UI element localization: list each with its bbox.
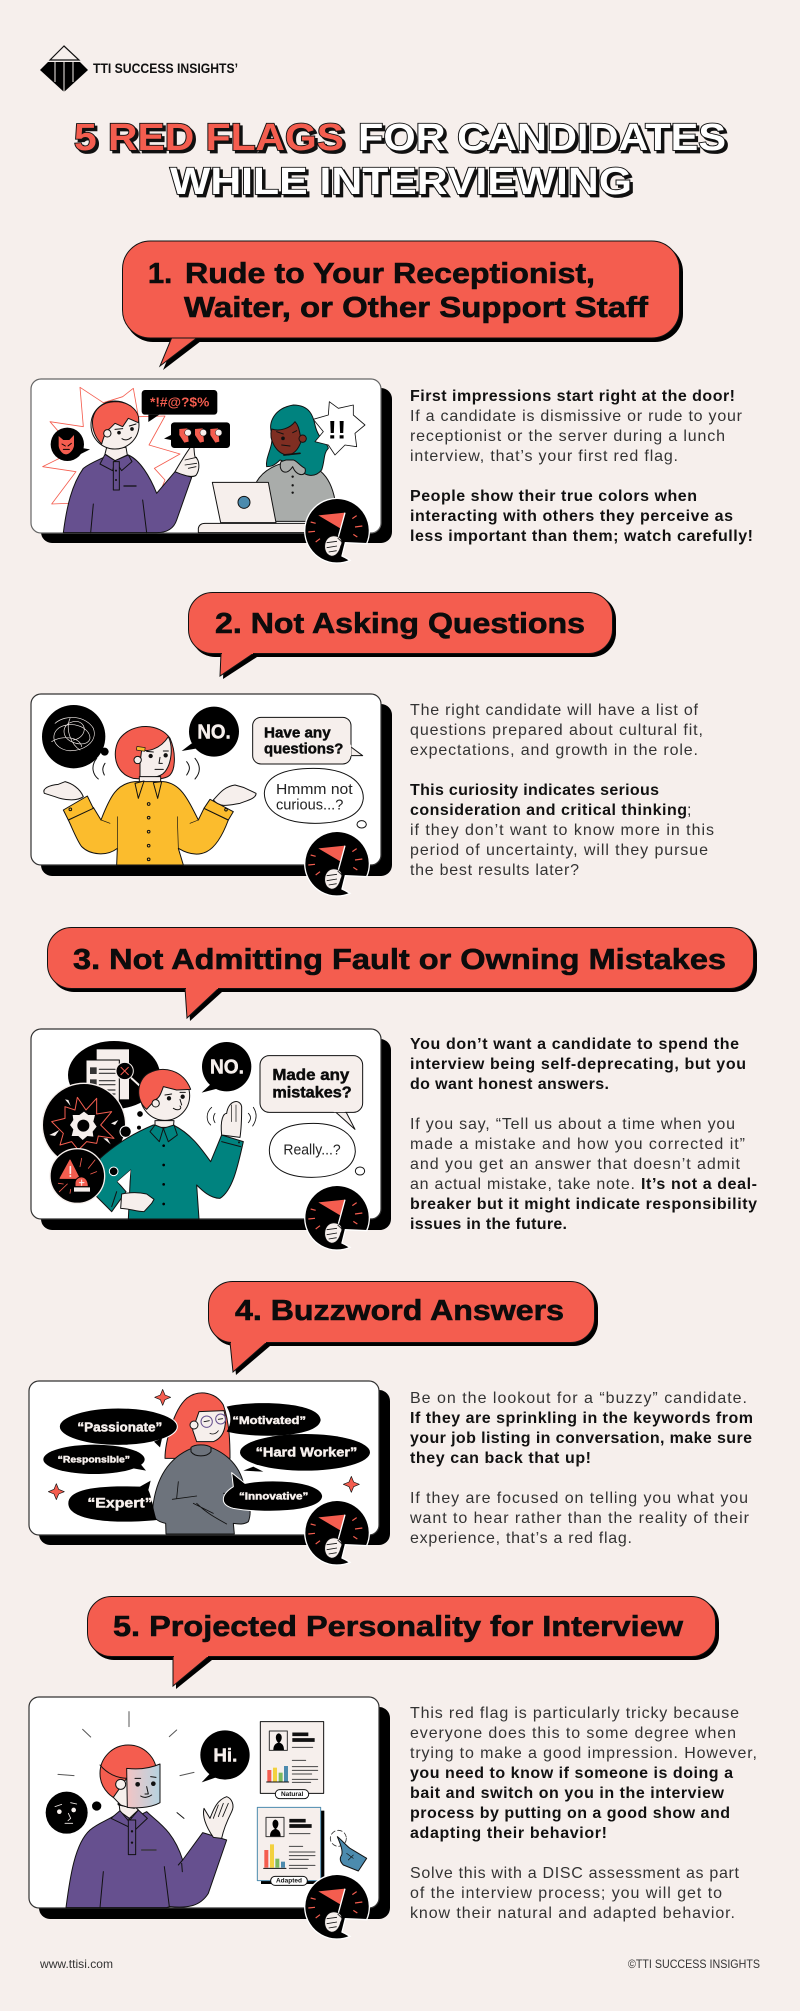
section 2 text: This curiosity indicates serious — [410, 782, 659, 799]
figures: man with mask and resumes: Natural — [281, 1791, 304, 1798]
section 2 text — [410, 702, 714, 879]
section 3 text: and you get an answer that doesn’t admit — [410, 1156, 741, 1173]
section 5 text: trying to make a good impression. However, — [410, 1745, 757, 1762]
panel 2: no questions illustration — [31, 694, 392, 876]
icon: red flag badge 3 — [305, 1185, 369, 1250]
section 1 heading bubble: Waiter, or Other Support Staff — [184, 292, 648, 324]
section 3 text: If you say, “Tell us about a time when you — [410, 1116, 735, 1133]
figures: shrugging woman: Hmmm not — [276, 782, 353, 798]
section 5 text: everyone does this to some degree when — [410, 1725, 736, 1742]
section 3 text: do want honest answers. — [410, 1076, 609, 1093]
section 2 text: expectations, and growth in the role. — [410, 742, 698, 759]
section 2 text: questions prepared about cultural fit, — [410, 722, 703, 739]
section 5 text: of the interview process; you will get to — [410, 1885, 722, 1902]
section 4 text: your job listing in conversation, make sure — [410, 1430, 752, 1447]
footer: copyright: ©TTI SUCCESS INSIGHTS — [628, 1957, 760, 1971]
logo: TTI Success Insights: TTI SUCCESS INSIGHTS’ — [93, 60, 238, 76]
figures: woman with crossed arms and buzzwords: “Responsible” — [58, 1454, 130, 1464]
icon: red flag badge 2 — [305, 831, 369, 896]
figures: woman with crossed arms and buzzwords — [43, 1389, 370, 1534]
section 1 text: People show their true colors when — [410, 488, 697, 505]
panel 1: rude candidate illustration — [31, 379, 392, 543]
figures: man raising hand with thought bubbles: Really...? — [283, 1142, 341, 1158]
section 5 text: adapting their behavior! — [410, 1825, 607, 1842]
section 3 heading bubble — [48, 928, 757, 1021]
section 4 text — [409, 1390, 753, 1547]
section 1 text: If a candidate is dismissive or rude to your — [410, 408, 743, 425]
section 2 text: consideration and critical thinking — [410, 802, 687, 819]
section 4 text: want to hear rather than the reality of their — [409, 1510, 750, 1527]
section 3 text: interview being self-deprecating, but you — [410, 1056, 746, 1073]
section 2 text: ; — [687, 802, 691, 819]
figures: shrugging woman — [42, 705, 366, 865]
section 2 text: period of uncertainty, will they pursue — [410, 842, 708, 859]
figures: shrugging woman: NO. — [197, 722, 231, 744]
figures: man raising hand with thought bubbles: NO. — [210, 1056, 244, 1078]
icon: red flag badge 4 — [305, 1500, 369, 1565]
section 5 heading bubble — [88, 1596, 719, 1689]
section 1 heading bubble: Rude to Your Receptionist, — [185, 258, 595, 290]
figures: man raising hand with thought bubbles: Made any — [272, 1067, 350, 1084]
section 4 text: If they are focused on telling you what you — [410, 1490, 748, 1507]
section 1 text: interview, that’s your first red flag. — [410, 448, 678, 465]
figures: man with mask and resumes — [46, 1712, 367, 1908]
section 3 text: made a mistake and how you corrected it” — [410, 1136, 745, 1153]
section 5 text — [410, 1705, 757, 1922]
title — [74, 117, 728, 206]
figures: man raising hand with thought bubbles: mistakes? — [272, 1084, 352, 1101]
icon: red flag badge 5 — [305, 1874, 369, 1939]
section 5 text: Solve this with a DISC assessment as part — [410, 1865, 740, 1882]
section 1 text: less important than them; watch carefully! — [410, 528, 753, 545]
panel 4: buzzword illustration — [29, 1381, 390, 1545]
section 2 heading bubble: 2. Not Asking Questions — [215, 608, 585, 640]
footer: website: www.ttisi.com — [39, 1957, 113, 1971]
figures: woman with crossed arms and buzzwords: “Passionate” — [77, 1420, 162, 1434]
figures: man raising hand with thought bubbles — [42, 1041, 365, 1219]
figures: shrugging woman: curious...? — [276, 797, 343, 813]
section 4 text: If they are sprinkling in the keywords from — [410, 1410, 753, 1427]
section 4 text: they can back that up! — [410, 1450, 591, 1467]
title: WHILE INTERVIEWING — [172, 164, 634, 206]
section 5 heading bubble: 5. Projected Personality for Interview — [113, 1611, 683, 1643]
logo: TTI Success Insights — [40, 46, 238, 92]
section 3 text: It’s not a deal- — [641, 1176, 757, 1193]
section 5 text: process by putting on a good show and — [410, 1805, 730, 1822]
figures: woman with crossed arms and buzzwords: “Expert” — [87, 1494, 153, 1510]
figures: shrugging woman: Have any — [264, 725, 332, 741]
title: 5 RED FLAGS — [76, 120, 346, 162]
section 5 text: you need to know if someone is doing a — [410, 1765, 733, 1782]
section 3 text: You don’t want a candidate to spend the — [410, 1036, 739, 1053]
figures: man with mask and resumes: Adapted — [276, 1878, 302, 1885]
section 3 heading bubble: 3. Not Admitting Fault or Owning Mistakes — [73, 944, 726, 976]
section 1 text — [410, 388, 753, 545]
section 5 text: This red flag is particularly tricky because — [410, 1705, 739, 1722]
figures: woman with crossed arms and buzzwords: “Hard Worker” — [256, 1445, 357, 1460]
section 2 heading bubble — [188, 592, 616, 679]
section 1 heading bubble — [122, 241, 683, 370]
section 1 text: receptionist or the server during a lunch — [410, 428, 725, 445]
title: 5 RED FLAGS — [74, 117, 344, 159]
title: FOR CANDIDATES — [360, 120, 728, 162]
section 3 text: issues in the future. — [410, 1216, 567, 1233]
section 4 heading bubble: 4. Buzzword Answers — [235, 1295, 564, 1327]
title: WHILE INTERVIEWING — [170, 161, 632, 203]
panel 5: projected personality illustration — [29, 1697, 390, 1919]
section 2 text: The right candidate will have a list of — [410, 702, 699, 719]
figures: shrugging woman: questions? — [264, 741, 343, 757]
section 1 text: interacting with others they perceive as — [410, 508, 733, 525]
figures: woman with crossed arms and buzzwords: “Motivated” — [232, 1415, 306, 1427]
section 3 text: an actual mistake, take note. — [410, 1176, 635, 1193]
panel 3: not admitting fault illustration — [31, 1029, 391, 1230]
section 2 text: the best results later? — [410, 862, 579, 879]
section 1 heading bubble: 1. — [148, 258, 172, 290]
section 3 text — [410, 1036, 757, 1233]
figures: angry man and receptionist — [43, 387, 365, 533]
section 5 text: know their natural and adapted behavior. — [410, 1905, 735, 1922]
section 1 text: First impressions start right at the door! — [410, 388, 735, 405]
section 4 text: experience, that’s a red flag. — [410, 1530, 632, 1547]
figures: angry man and receptionist: *!#@?$% — [150, 395, 209, 410]
section 4 text: Be on the lookout for a “buzzy” candidate. — [410, 1390, 747, 1407]
section 3 text: breaker but it might indicate responsibility — [410, 1196, 757, 1213]
section 4 heading bubble — [208, 1282, 598, 1375]
figures: woman with crossed arms and buzzwords: “Innovative” — [239, 1491, 308, 1502]
section 5 text: bait and switch on you in the interview — [410, 1785, 725, 1802]
figures: man with mask and resumes: Hi. — [213, 1745, 237, 1766]
section 2 text: if they don’t want to know more in this — [410, 822, 714, 839]
icon: red flag badge 1 — [305, 498, 369, 563]
title: FOR CANDIDATES — [358, 117, 726, 159]
figures: angry man and receptionist: !! — [328, 418, 346, 445]
